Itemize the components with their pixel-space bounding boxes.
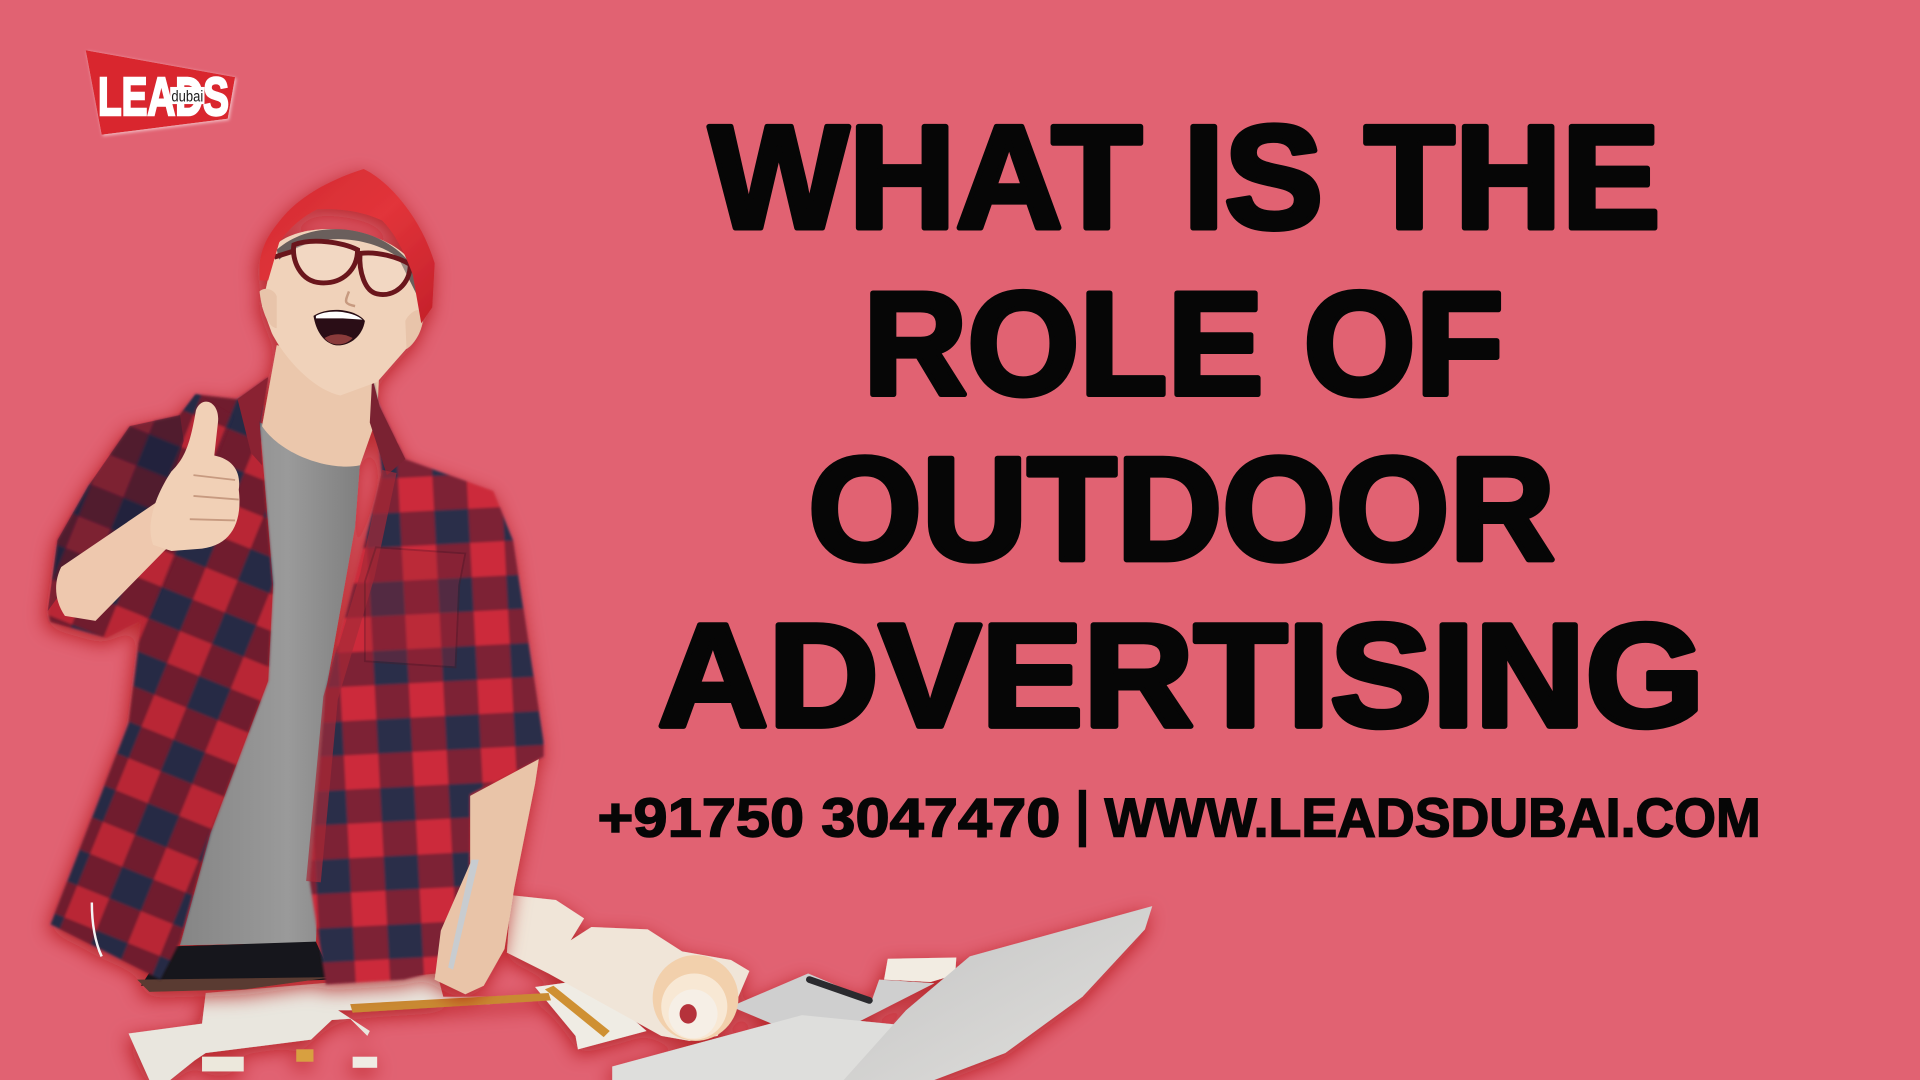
grey t-shirt	[180, 422, 360, 945]
paper under roll	[535, 980, 647, 1049]
website: WWW.LEADSDUBAI.COM	[1104, 786, 1761, 848]
chest pocket	[365, 547, 465, 667]
thumbs-up hand	[151, 402, 240, 551]
ears	[260, 289, 423, 349]
title line 3: OUTDOOR	[808, 428, 1555, 592]
hair band under helmet	[277, 229, 416, 294]
marker pen	[809, 980, 869, 1000]
logo: Leads Dubai	[86, 50, 235, 135]
open mouth	[313, 310, 365, 345]
laptop keyboard	[612, 1015, 912, 1080]
pen	[448, 860, 479, 970]
title line 4: ADVERTISING	[658, 594, 1704, 758]
glasses	[274, 241, 410, 294]
small paper scraps	[202, 1049, 377, 1071]
separator	[1079, 790, 1086, 847]
title line 1: WHAT IS THE	[709, 96, 1660, 260]
sleeve shade	[48, 415, 184, 611]
nose	[346, 291, 355, 306]
title line 2: ROLE OF	[863, 262, 1504, 426]
white box	[884, 958, 956, 982]
phone number: +91750 3047470	[598, 786, 1060, 848]
gray documents	[731, 973, 934, 1029]
neck	[262, 345, 380, 467]
left shirt sleeve	[48, 394, 233, 638]
left shirt panel	[50, 377, 273, 980]
title	[658, 96, 1704, 758]
right collar	[370, 377, 405, 475]
raised arm	[56, 497, 178, 621]
black trousers and belt	[137, 942, 333, 992]
person: laughing man in plaid shirt and hard hat	[48, 169, 544, 994]
paper sheet on desk	[129, 973, 490, 1080]
right shirt panel with sleeve	[310, 377, 544, 984]
laptop screen	[844, 906, 1152, 1080]
left collar	[238, 377, 268, 465]
head	[262, 229, 422, 396]
placket highlight	[313, 471, 389, 882]
ruler	[350, 986, 610, 1037]
shirt hem highlight	[92, 902, 102, 956]
logo: Leads Dubai: dubai	[171, 89, 203, 106]
red hard hat	[260, 169, 435, 323]
contact line	[598, 786, 1761, 848]
paper roll	[507, 895, 749, 1041]
forearm and writing hand	[435, 759, 539, 994]
logo: Leads Dubai: LEADS	[98, 67, 229, 127]
desk items illustration	[129, 895, 1152, 1080]
